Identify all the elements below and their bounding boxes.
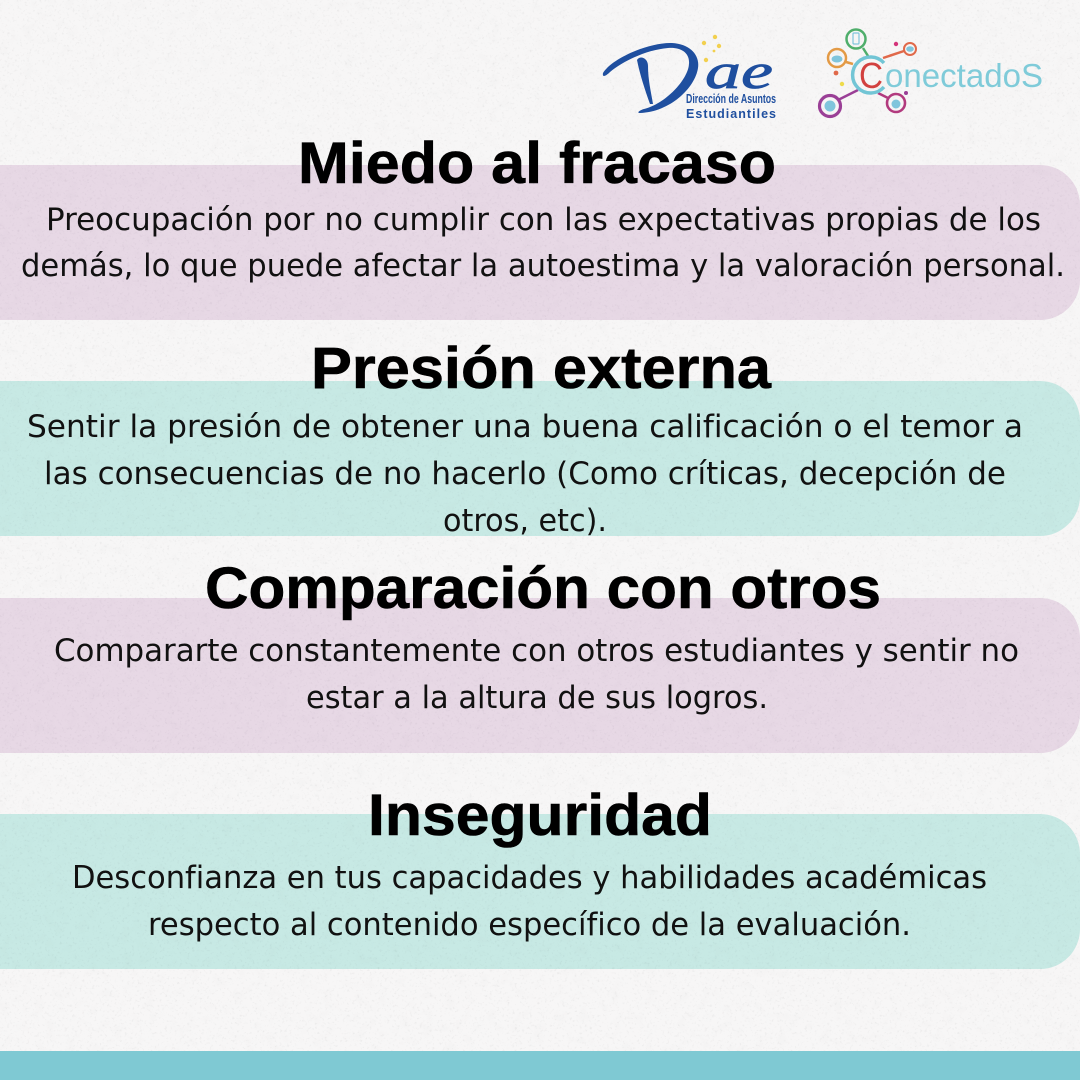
band: teal [0, 814, 1080, 969]
heading: Presión externa [311, 336, 772, 401]
body text: Desconfianza en tus capacidades y habilidades académicas [72, 860, 987, 896]
body text: Compararte constantemente con otros estudiantes y sentir no [54, 633, 1019, 669]
body text: Sentir la presión de obtener una buena calificación o el temor a [27, 409, 1023, 445]
body text [72, 860, 987, 943]
body text [54, 633, 1019, 716]
bottom bar [0, 1051, 1080, 1080]
body text: respecto al contenido específico de la evaluación. [148, 907, 911, 943]
panel: comparación con otros [0, 556, 1080, 753]
logo: ConectadoS: C [859, 55, 883, 96]
band: pink [0, 165, 1080, 320]
panel: inseguridad [0, 783, 1080, 969]
body text: otros, etc). [443, 503, 607, 539]
logo: Dirección de Asuntos Estudiantiles: Estudiantiles [686, 107, 776, 121]
panel: miedo al fracaso [0, 131, 1080, 320]
band: teal [0, 381, 1080, 536]
band: pink [0, 598, 1080, 753]
heading: Miedo al fracaso [298, 131, 776, 196]
logo: Dirección de Asuntos Estudiantiles: Dirección de Asuntos [686, 91, 776, 106]
body text [21, 202, 1065, 284]
logo: ConectadoS [820, 30, 1043, 116]
logo: ConectadoS: onectadoS [885, 57, 1043, 94]
logo: Dirección de Asuntos Estudiantiles: ae [705, 43, 773, 99]
body text: Preocupación por no cumplir con las expectativas propias de los [46, 202, 1041, 238]
body text: las consecuencias de no hacerlo (Como críticas, decepción de [44, 456, 1006, 492]
heading: Comparación con otros [205, 556, 881, 621]
heading: Inseguridad [368, 783, 712, 848]
panel: presión externa [0, 336, 1080, 539]
logo: Dirección de Asuntos Estudiantiles [603, 35, 776, 121]
body text [27, 409, 1023, 539]
body text: demás, lo que puede afectar la autoestima y la valoración personal. [21, 248, 1065, 284]
body text: estar a la altura de sus logros. [306, 680, 768, 716]
